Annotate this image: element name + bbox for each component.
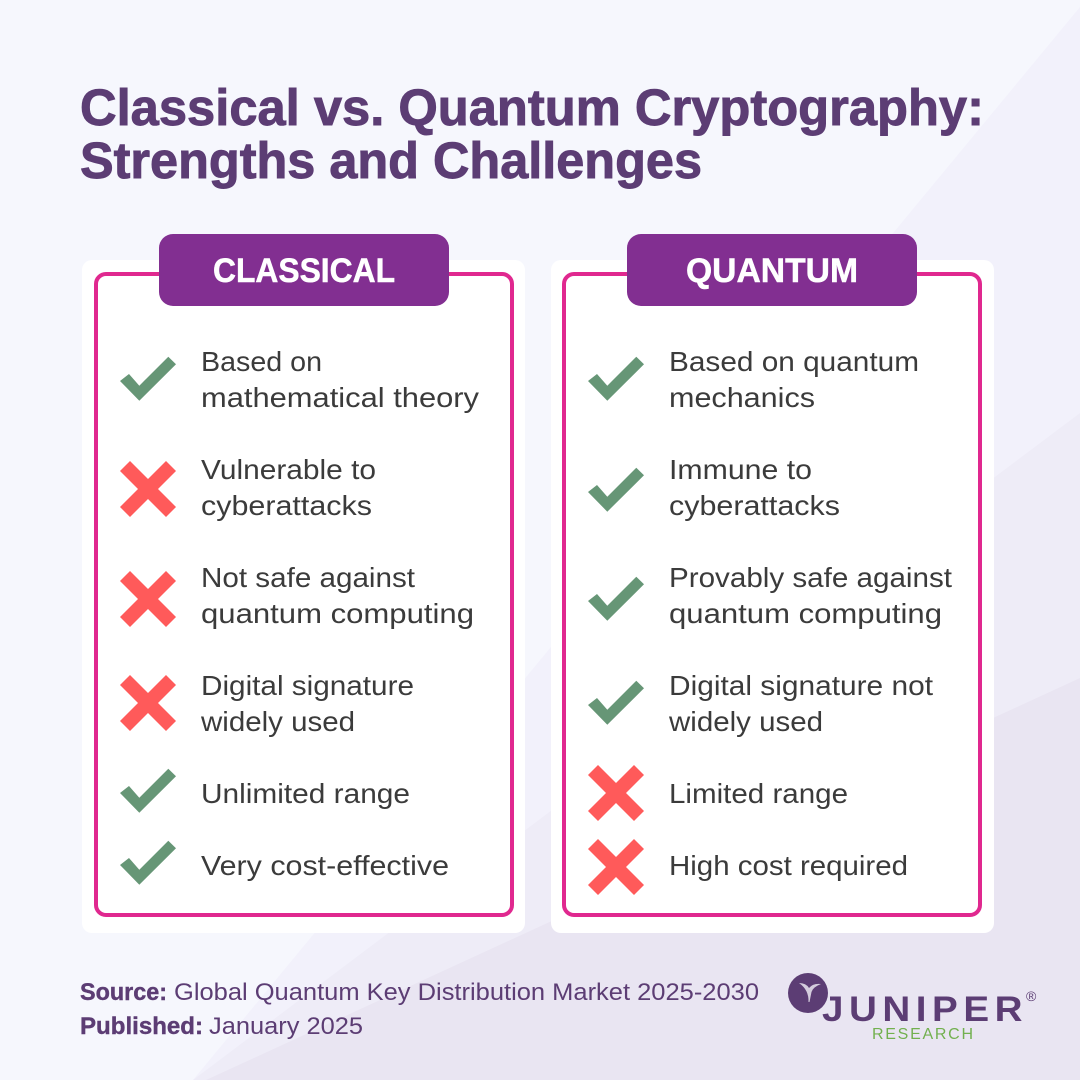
item: mathematical theory: Based on xyxy=(201,346,322,377)
source note: January 2025 xyxy=(209,1013,363,1040)
item: immune to cyberattacks: cyberattacks xyxy=(669,490,840,521)
card background: quantum xyxy=(551,260,994,933)
item: provably safe xyxy=(588,562,952,629)
heading: classical xyxy=(159,234,449,306)
item: not safe against quantum computing xyxy=(120,562,474,629)
item: high cost required: High cost required xyxy=(669,850,908,881)
heading: quantum xyxy=(627,234,917,306)
logo: Juniper Research xyxy=(788,973,1037,1043)
item: vulnerable to cyberattacks: Vulnerable to xyxy=(201,454,376,485)
item: mathematical theory xyxy=(120,346,479,413)
logo: Juniper Research: ® xyxy=(1026,988,1037,1004)
item: not safe against quantum computing: Not safe against xyxy=(201,562,415,593)
source note: Source: xyxy=(80,979,167,1006)
panel: classical xyxy=(82,234,525,933)
item: unlimited range: Unlimited range xyxy=(201,778,410,809)
item: not safe against quantum computing: quantum computing xyxy=(201,598,474,629)
item: vulnerable to cyberattacks xyxy=(120,454,376,521)
source note: Published: xyxy=(80,1013,203,1040)
heading: quantum: QUANTUM xyxy=(686,252,858,290)
item: quantum mechanics xyxy=(588,346,919,413)
item: digital signature not widely used: widely used xyxy=(668,706,823,737)
item: provably safe: Provably safe against xyxy=(669,562,952,593)
item: mathematical theory: mathematical theory xyxy=(201,382,479,413)
item: digital signature widely used: widely used xyxy=(200,706,355,737)
heading: classical: CLASSICAL xyxy=(213,252,395,290)
item: high cost required xyxy=(588,839,908,895)
item: limited range xyxy=(588,765,848,821)
item: vulnerable to cyberattacks: cyberattacks xyxy=(201,490,372,521)
item: digital signature widely used xyxy=(120,670,414,737)
card border: classical xyxy=(96,274,512,915)
title: Strengths and Challenges xyxy=(80,132,702,189)
title: Classical vs. Quantum Cryptography: xyxy=(80,79,984,136)
item: unlimited range xyxy=(120,769,410,813)
item: provably safe: quantum computing xyxy=(669,598,942,629)
card background: classical xyxy=(82,260,525,933)
item: quantum mechanics: mechanics xyxy=(669,382,815,413)
item: immune to cyberattacks xyxy=(588,454,840,521)
logo: Juniper Research: RESEARCH xyxy=(872,1026,973,1043)
item: digital signature not widely used xyxy=(588,670,933,737)
item: digital signature not widely used: Digital signature not xyxy=(669,670,933,701)
item: very cost-effective xyxy=(120,841,449,885)
logo: Juniper Research: JUNIPER xyxy=(822,990,1028,1029)
panel: quantum xyxy=(551,234,994,933)
item: immune to cyberattacks: Immune to xyxy=(669,454,812,485)
item: digital signature widely used: Digital signature xyxy=(201,670,414,701)
title xyxy=(80,79,984,189)
item: limited range: Limited range xyxy=(669,778,848,809)
source note xyxy=(80,979,759,1040)
item: quantum mechanics: Based on quantum xyxy=(669,346,919,377)
card border: quantum xyxy=(564,274,980,915)
source note: Global Quantum Key Distribution Market 2025-2030 xyxy=(174,979,759,1006)
item: very cost-effective: Very cost-effective xyxy=(201,850,449,881)
